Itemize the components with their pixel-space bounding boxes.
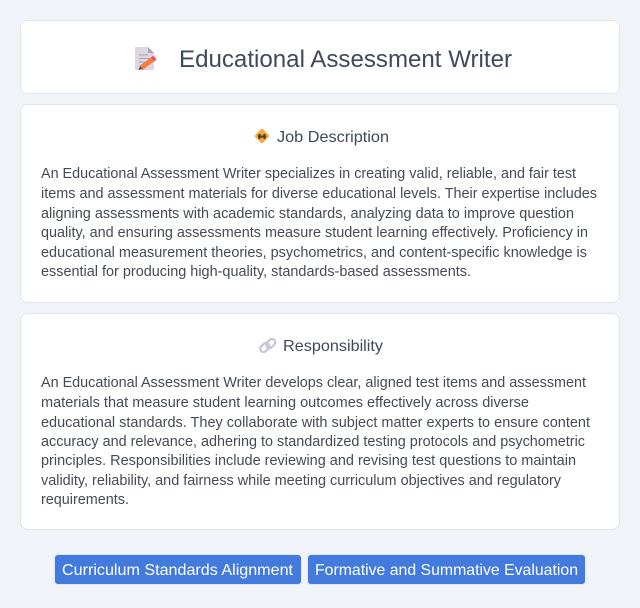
text: responsibility body: validity, reliability, and fairness while meeting curriculum objectives and regulatory: [41, 473, 562, 489]
text: responsibility body: principles. Responsibilities include reviewing and revising test questions to maintain: [41, 453, 576, 469]
text: responsibility body: materials that measure student learning outcomes effectively across diverse: [41, 395, 529, 411]
panel: responsibility: [20, 313, 620, 530]
panel: title header: [20, 20, 620, 94]
icon: construction diamond: [254, 128, 270, 144]
text: job description body: [41, 166, 597, 280]
text: responsibility body: An Educational Assessment Writer develops clear, aligned test items and assessment: [41, 375, 586, 391]
title: Educational Assessment Writer: [179, 46, 512, 73]
text: job description body: educational measurement theories, psychometrics, and content-specific knowledge is: [41, 245, 587, 261]
button: formative and summative evaluation: [308, 555, 585, 584]
panel: job description: [20, 104, 620, 303]
heading: responsibility: Responsibility: [283, 338, 383, 355]
heading: job description: Job Description: [277, 129, 389, 146]
text: job description body: items and assessment materials for diverse educational levels. Their expertise includes: [41, 186, 597, 202]
button label: formative and summative evaluation: Formative and Summative Evaluation: [315, 562, 578, 579]
text: job description body: quality, and ensuring assessments measure student learning effectively. Proficiency in: [41, 225, 588, 241]
text: job description body: An Educational Assessment Writer specializes in creating valid, reliable, and fair test: [41, 166, 576, 182]
text: job description body: essential for producing high-quality, standards-based assessments.: [41, 264, 471, 280]
button: curriculum standards alignment: [55, 555, 301, 584]
text: job description body: aligning assessments with academic standards, analyzing data to improve question: [41, 206, 574, 222]
icon: link: [259, 338, 277, 353]
text: responsibility body: [41, 375, 590, 508]
text: responsibility body: requirements.: [41, 492, 129, 508]
text: responsibility body: accuracy and relevance, adhering to standardized testing protocols and psychometric: [41, 434, 585, 450]
icon: memo with pencil: [135, 47, 155, 70]
button label: curriculum standards alignment: Curriculum Standards Alignment: [62, 562, 294, 579]
text: responsibility body: educational standards. They collaborate with subject matter experts to ensure content: [41, 415, 590, 431]
